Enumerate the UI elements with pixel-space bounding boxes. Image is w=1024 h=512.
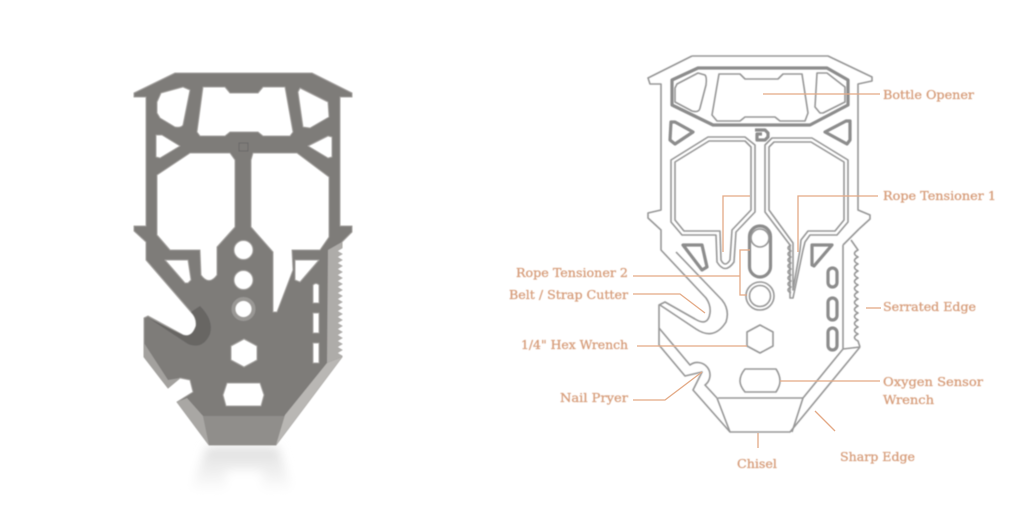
right large window	[765, 138, 848, 298]
label: bottle opener: Bottle Opener	[883, 88, 974, 102]
hook bevel line	[660, 252, 727, 334]
label: nail pryer: Nail Pryer	[560, 391, 628, 405]
nail pryer bevel	[144, 343, 180, 388]
label: rope tensioner 1: Rope Tensioner 1	[883, 189, 996, 203]
leader: belt cutter	[633, 294, 705, 313]
leader: bottle opener	[763, 93, 880, 95]
hook inner shading	[150, 306, 211, 346]
serrated edge band	[327, 242, 342, 363]
leader lines	[633, 94, 881, 448]
leader: sharp edge	[815, 411, 835, 431]
label: sharp edge: Sharp Edge	[840, 450, 915, 464]
top left window	[675, 73, 706, 112]
serrated edge	[851, 240, 860, 347]
outer outline	[648, 56, 872, 432]
label: chisel: Chisel	[737, 457, 777, 471]
round hole ring	[746, 282, 774, 310]
top window frame	[672, 68, 848, 125]
engraved logo square	[239, 143, 248, 151]
leader: rope tensioner 2	[633, 250, 750, 295]
upper left triangle	[670, 122, 693, 144]
hex hole	[747, 325, 773, 353]
nail pryer arc	[659, 328, 730, 432]
right sharp edge bevel	[276, 357, 342, 445]
saw teeth on tensioner	[788, 245, 791, 293]
label: serrated edge: Serrated Edge	[883, 300, 976, 314]
upper right triangle	[825, 121, 850, 144]
leader: hex wrench	[637, 345, 747, 347]
reflection under photographed tool	[190, 447, 293, 494]
photo of multi-tool	[134, 73, 352, 445]
ring around round hole	[233, 298, 254, 320]
label: oxygen sensor wrench	[883, 375, 983, 407]
leader: serrated edge	[866, 307, 881, 309]
left lower bevel	[177, 398, 209, 445]
label: belt strap cutter: Belt / Strap Cutter	[509, 288, 628, 302]
rope tensioner 2 slot	[750, 226, 770, 277]
label: oxygen sensor wrench: Oxygen Sensor	[883, 375, 983, 389]
leader: chisel	[757, 433, 759, 448]
tool body with cutouts	[134, 73, 352, 445]
callout labels	[509, 88, 996, 471]
logo D mark	[755, 130, 768, 140]
leader: rope tensioner 1	[798, 196, 878, 252]
small edge slots	[828, 268, 837, 350]
line drawing of multi-tool	[648, 56, 872, 432]
label: oxygen sensor wrench: Wrench	[883, 393, 934, 407]
top right window	[815, 73, 845, 113]
leader: nail pryer	[633, 372, 702, 400]
lower right triangle	[812, 245, 832, 266]
oxygen sensor wrench hole	[740, 369, 780, 392]
leader: oxygen sensor	[780, 380, 880, 382]
lower left triangle	[683, 245, 707, 270]
left large window	[671, 137, 755, 268]
serration teeth	[338, 248, 343, 356]
slot circle	[751, 229, 769, 247]
bottle opener window	[712, 74, 808, 121]
label: hex wrench: 1/4" Hex Wrench	[521, 338, 628, 352]
chisel bevel lines	[718, 229, 860, 432]
bottom chisel bevel	[203, 416, 285, 445]
label: rope tensioner 2: Rope Tensioner 2	[516, 266, 628, 280]
leader: upper tensioner slot	[723, 196, 750, 252]
